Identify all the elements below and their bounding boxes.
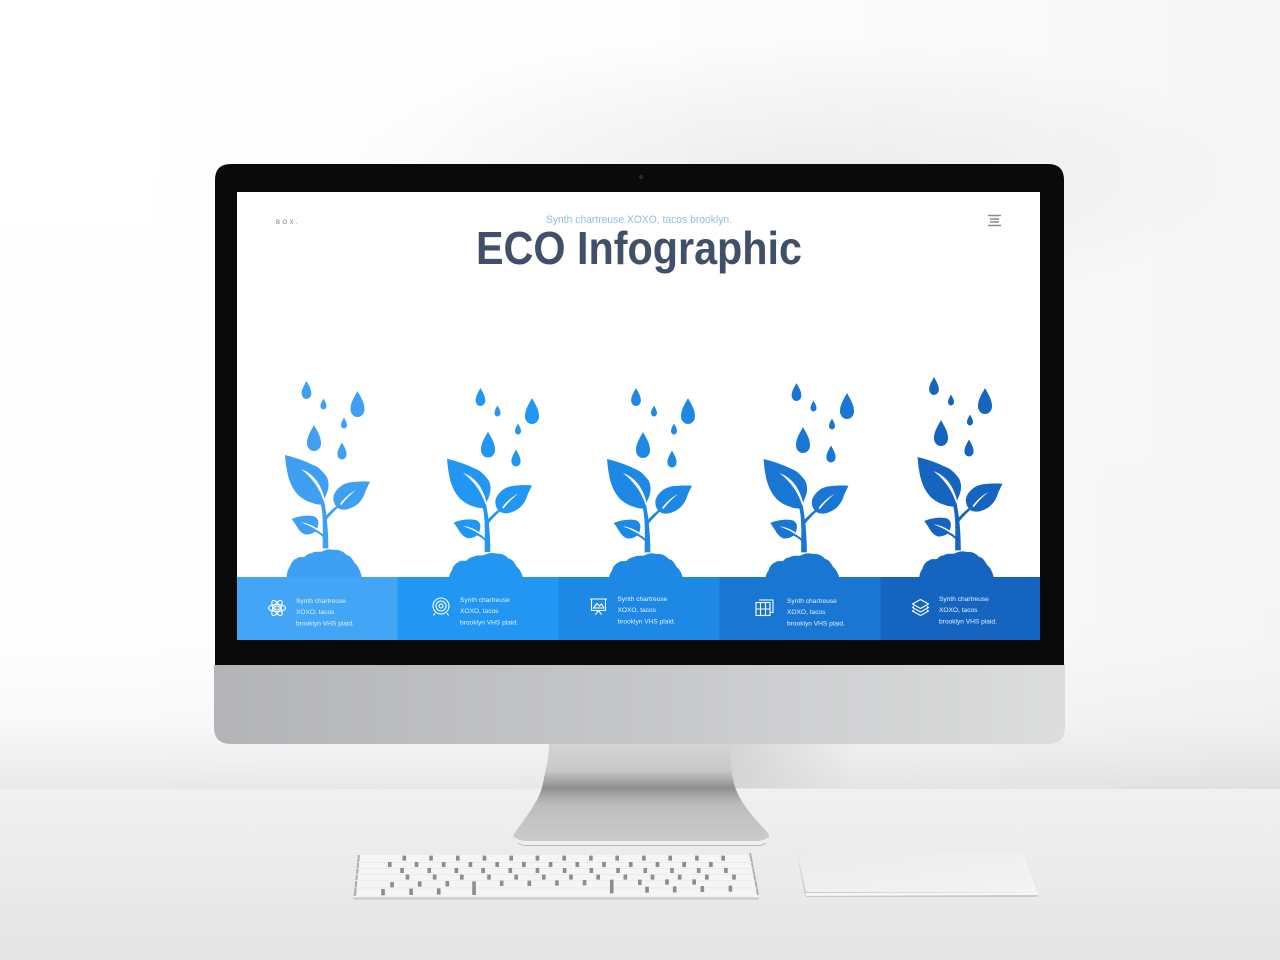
icon: menu: [988, 216, 1001, 226]
subtitle: Synth chartreuse XOXO, tacos brooklyn.: [546, 214, 732, 226]
screen: [237, 192, 1040, 640]
plant 1: [285, 381, 370, 578]
keyboard key gaps: [381, 856, 736, 895]
panel 3: [558, 577, 720, 640]
panel 5 text: brooklyn VHS plaid.: [939, 618, 997, 626]
monitor chin: [214, 665, 1065, 744]
panel 1 text: XOXO, tacos: [296, 609, 335, 616]
panel 2: [398, 577, 558, 640]
panel 2 text: XOXO, tacos: [460, 608, 499, 615]
panel 5: [880, 577, 1040, 640]
panel 4: [720, 577, 880, 640]
panel 4 text: Synth chartreuse: [787, 598, 837, 605]
panel 2 text: brooklyn VHS plaid.: [460, 620, 518, 626]
panel 5 text: XOXO, tacos: [939, 607, 978, 614]
icon: atom: [268, 599, 286, 617]
monitor stand: [513, 744, 770, 846]
panel 5 text: Synth chartreuse: [939, 596, 989, 603]
plant 3: [607, 388, 695, 582]
panel 4 text: XOXO, tacos: [787, 609, 826, 616]
panel 1 text: Synth chartreuse: [296, 598, 346, 605]
trackpad: [797, 853, 1038, 897]
panel 3 text: XOXO, tacos: [618, 607, 657, 614]
webcam: [639, 175, 643, 179]
icon: target: [433, 598, 449, 616]
icon: presentation board: [590, 599, 607, 614]
panel 2 text: Synth chartreuse: [460, 597, 510, 604]
monitor: [214, 164, 1065, 744]
icon: layers: [912, 600, 928, 616]
panel 1 text: brooklyn VHS plaid.: [296, 620, 354, 628]
panel 4 text: brooklyn VHS plaid.: [787, 620, 845, 628]
shadow behind the stand: [730, 744, 860, 788]
icon: frames: [756, 600, 773, 616]
panel 3 text: brooklyn VHS plaid.: [618, 618, 676, 626]
keyboard: [353, 853, 759, 900]
panel 1: [237, 577, 398, 640]
plant 2: [447, 388, 539, 582]
monitor bezel: [215, 164, 1064, 665]
title: ECO Infographic: [476, 222, 802, 274]
logo text: BOX.: [276, 220, 300, 226]
panel 3 text: Synth chartreuse: [618, 596, 668, 603]
plant 5: [917, 377, 1002, 580]
desk surface: [0, 789, 1280, 960]
plant 4: [763, 383, 854, 582]
